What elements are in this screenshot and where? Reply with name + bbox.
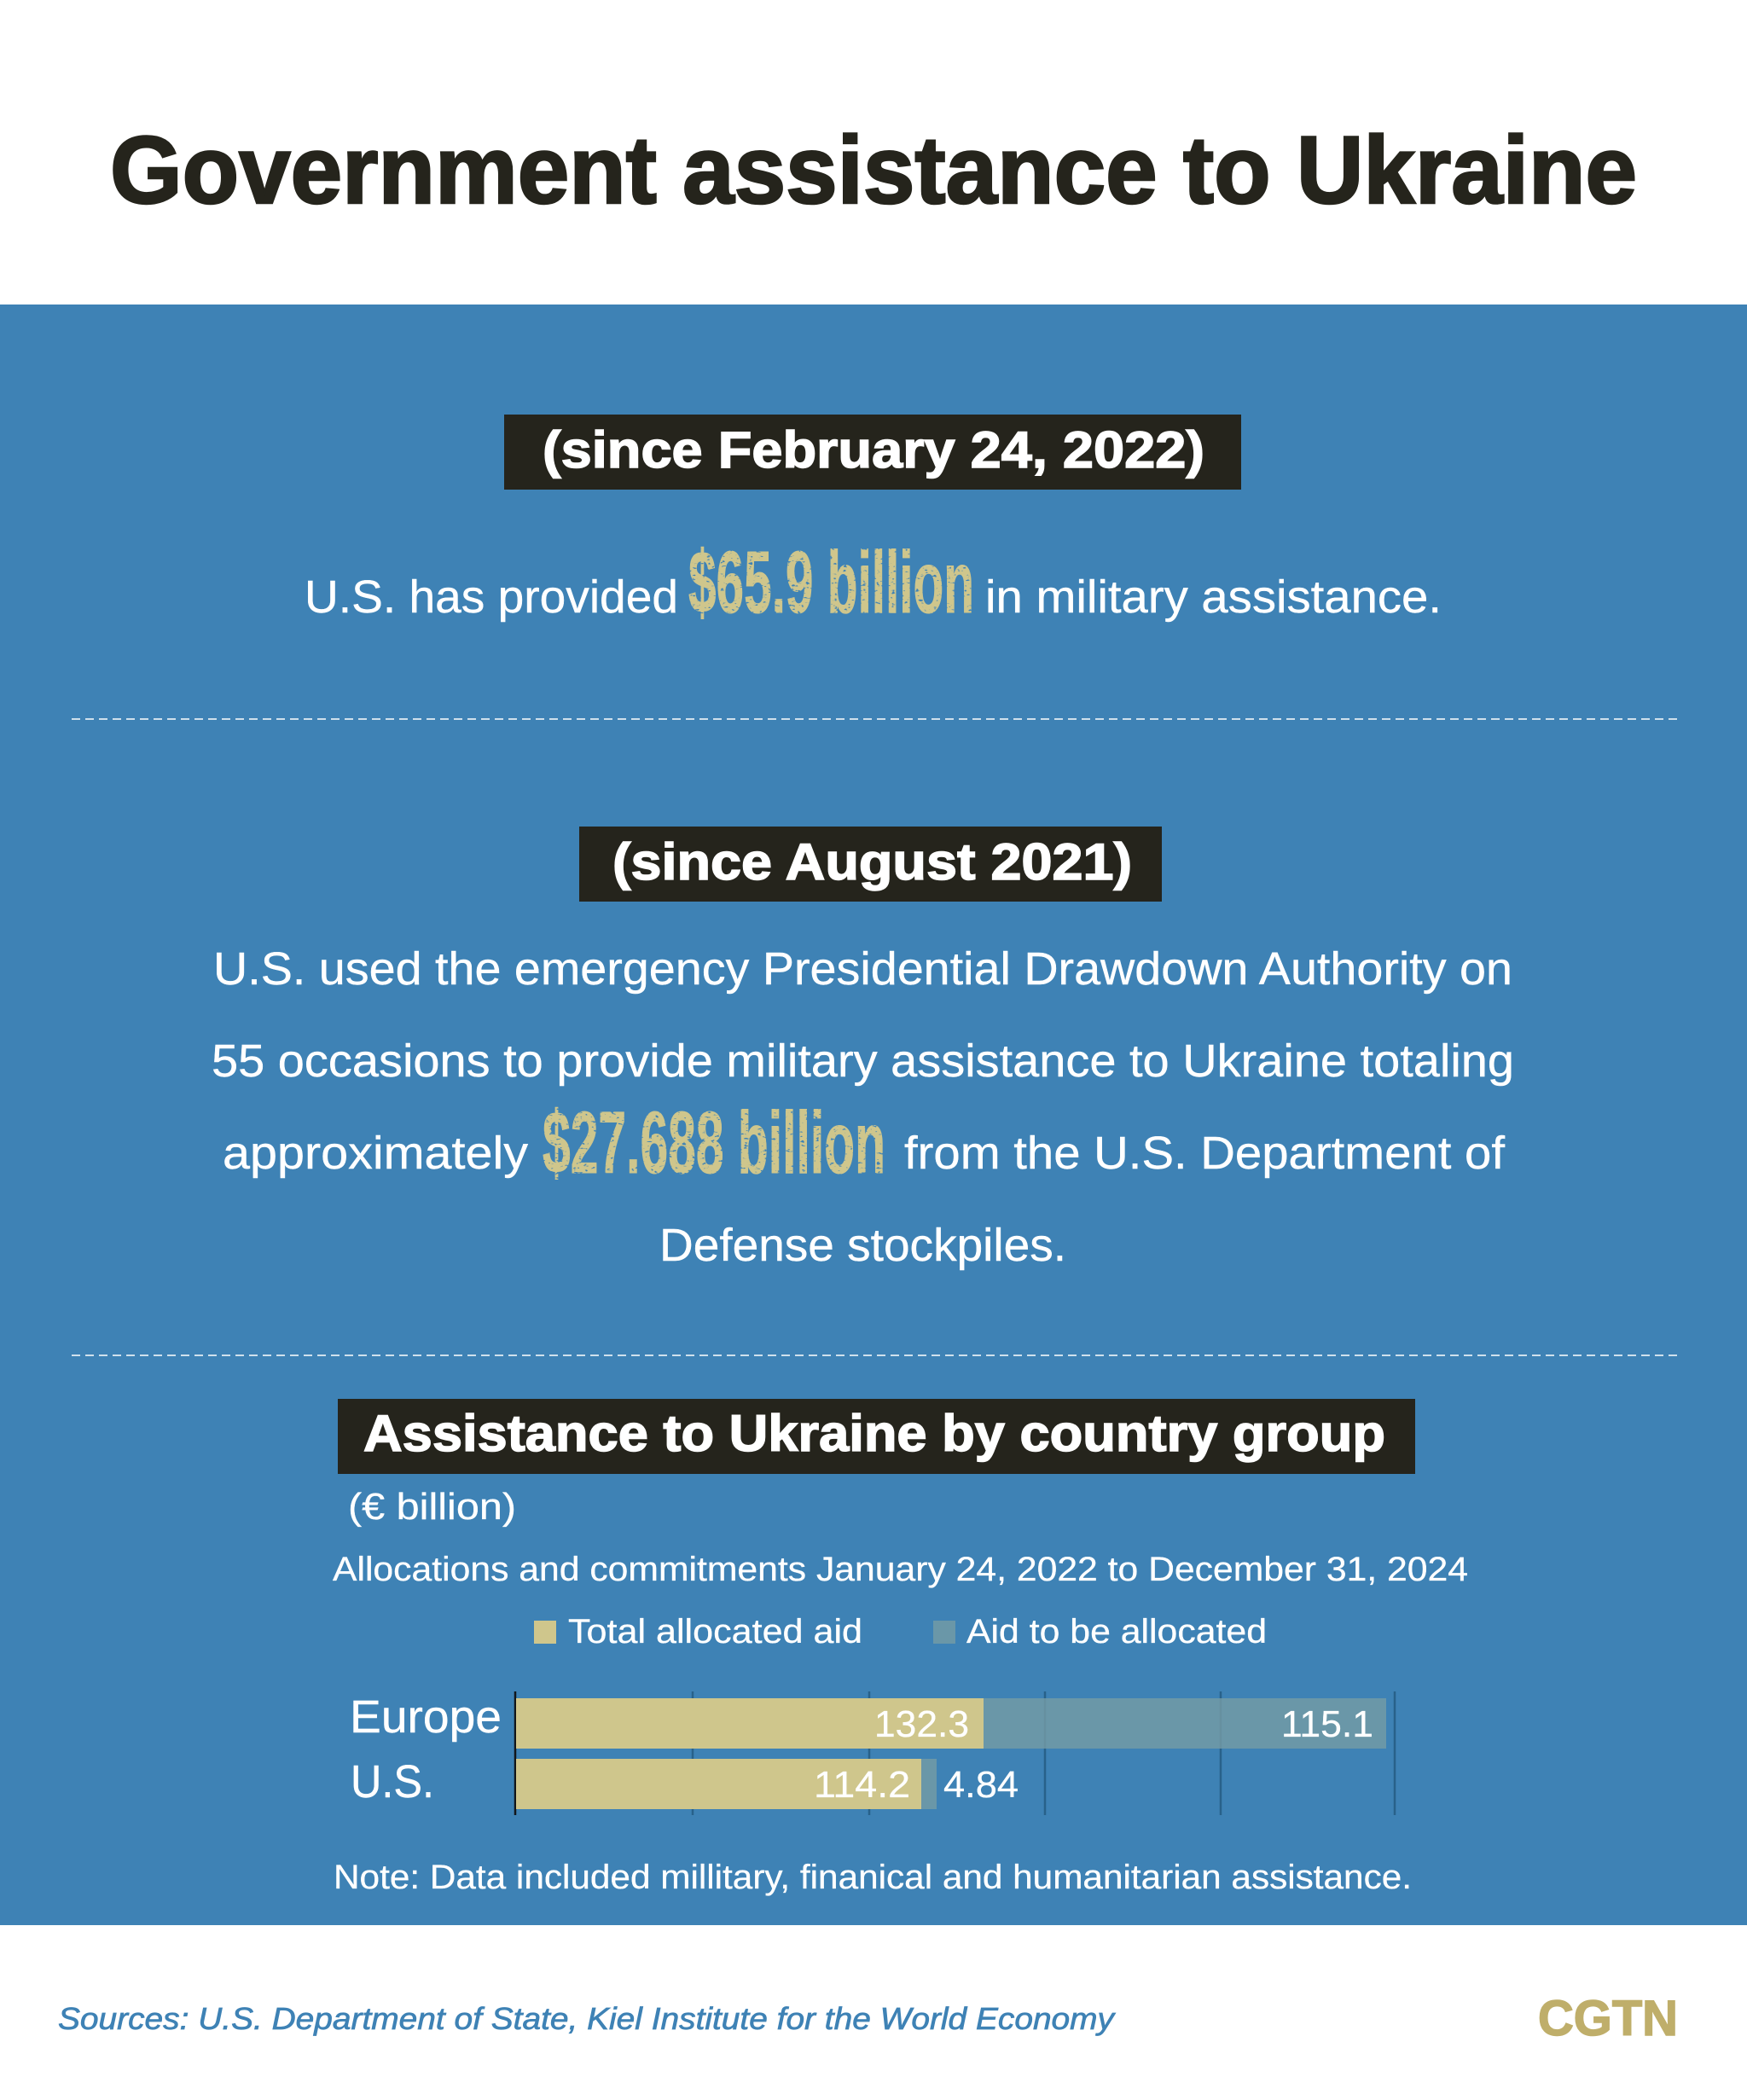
- row: Europe: Europe: [350, 1691, 502, 1743]
- text block: U.S. military assistance: U.S. has provided: [305, 571, 678, 623]
- bar chart: [350, 1691, 1395, 1815]
- logo: CGTN: CGTN: [1538, 1991, 1678, 2046]
- text block: U.S. military assistance: $65.9 billion: [688, 533, 974, 631]
- row: U.S.: 114.2: [814, 1764, 910, 1806]
- text block: U.S. military assistance: in military assistance.: [985, 571, 1442, 623]
- heading: since August 2021: (since August 2021): [612, 833, 1132, 890]
- chart subtitle: Allocations and commitments January 24, 2022 to December 31, 2024: [333, 1551, 1468, 1588]
- text block: U.S. military assistance: [305, 533, 1442, 631]
- heading: since February 24, 2022: (since February 24, 2022): [543, 421, 1204, 479]
- chart unit: (€ billion): [348, 1486, 516, 1528]
- row: Europe: 115.1: [1281, 1703, 1373, 1745]
- section: since August 2021: [212, 827, 1514, 1271]
- heading: since August 2021: [579, 827, 1162, 902]
- text block: Presidential Drawdown Authority: approximately: [223, 1128, 528, 1179]
- text block: Presidential Drawdown Authority: [212, 943, 1514, 1271]
- text block: Presidential Drawdown Authority: from the U.S. Department of: [904, 1128, 1506, 1179]
- legend: aid to be allocated: Aid to be allocated: [966, 1613, 1267, 1650]
- sources: Sources: U.S. Department of State, Kiel Institute for the World Economy: [58, 2001, 1116, 2036]
- text block: Presidential Drawdown Authority: $27.688 billion: [543, 1094, 885, 1192]
- text block: Presidential Drawdown Authority: U.S. used the emergency Presidential Drawdown Authority on: [213, 943, 1512, 995]
- section: since February 2022: [305, 415, 1442, 631]
- row: U.S.: U.S.: [351, 1756, 434, 1807]
- note: Note: Data included millitary, finanical and humanitarian assistance.: [334, 1859, 1412, 1896]
- row: U.S.: [351, 1756, 1019, 1809]
- panel: blue background: [0, 305, 1747, 1925]
- legend: [534, 1613, 1267, 1650]
- text block: Presidential Drawdown Authority: Defense stockpiles.: [659, 1220, 1066, 1271]
- heading: assistance by country group: Assistance to Ukraine by country group: [363, 1405, 1385, 1462]
- heading: since February 24, 2022: [504, 415, 1241, 490]
- row: Europe: [350, 1691, 1386, 1749]
- row: Europe: 132.3: [874, 1703, 969, 1745]
- heading: assistance by country group: [338, 1399, 1415, 1474]
- text block: Presidential Drawdown Authority: 55 occasions to provide military assistance to Ukraine totaling: [212, 1035, 1514, 1087]
- row: U.S.: 4.84: [943, 1764, 1019, 1806]
- legend: total allocated aid: Total allocated aid: [568, 1613, 862, 1650]
- title: Government assistance to Ukraine: [110, 117, 1637, 223]
